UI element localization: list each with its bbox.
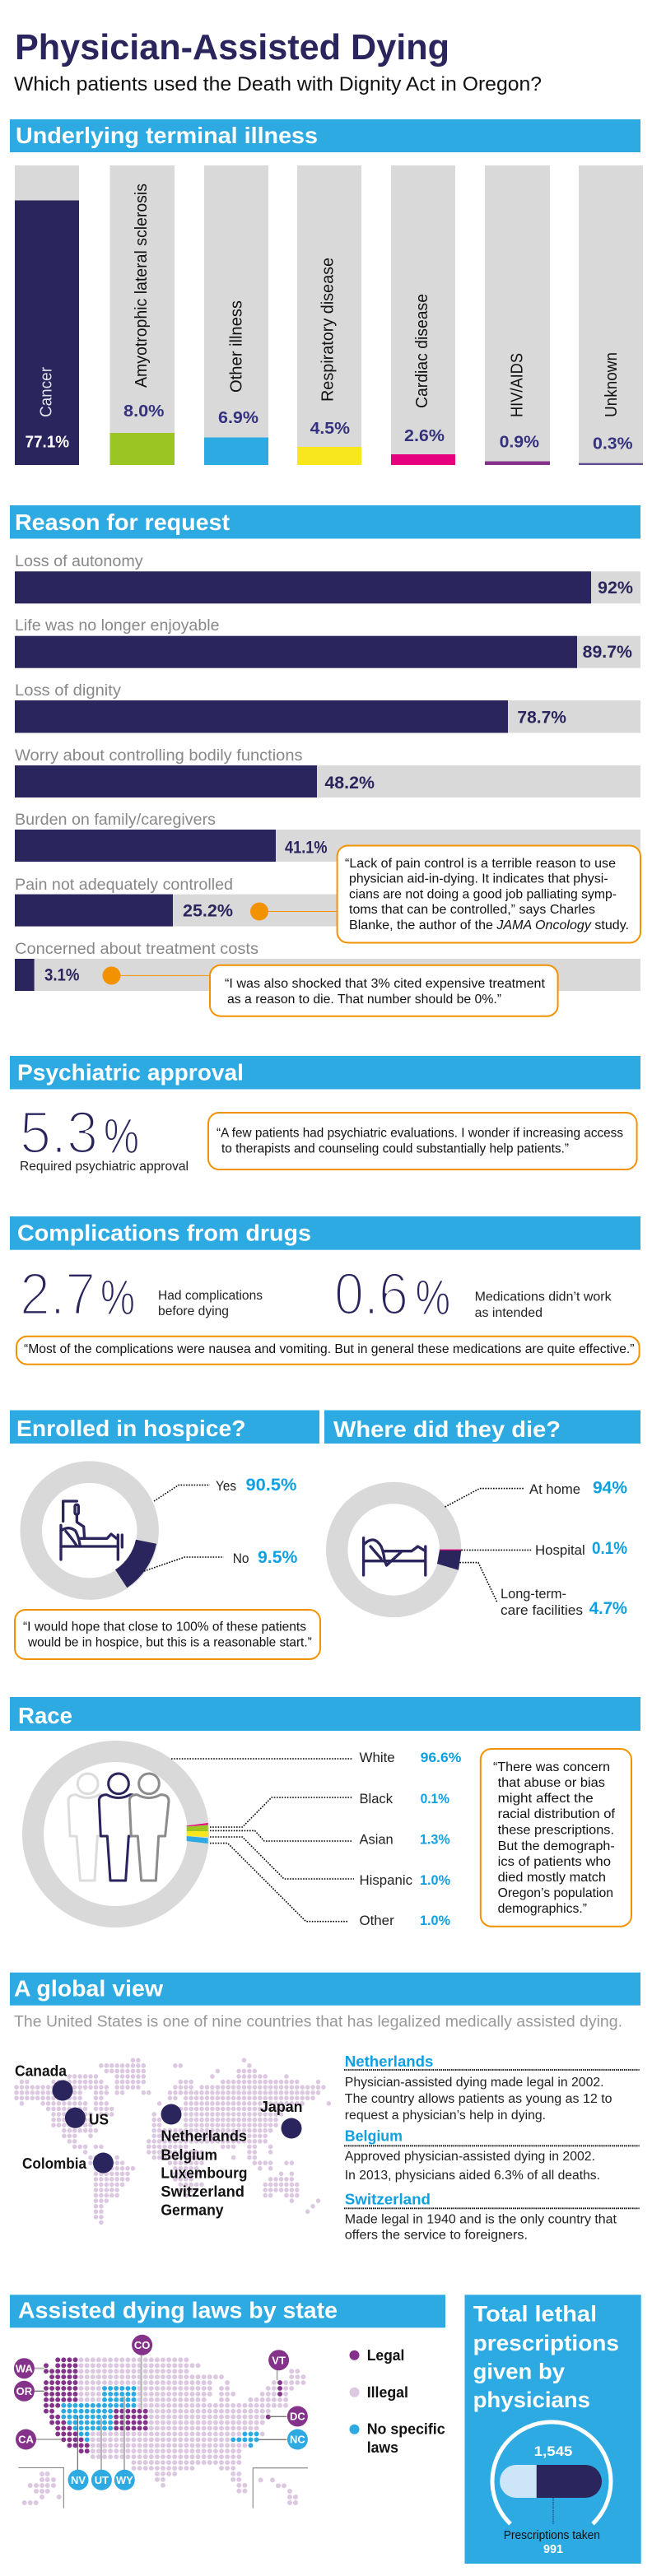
callout: complications quote: “Most of the complications were nausea and vomiting. But in general these medications are quite effective.”	[24, 1342, 634, 1356]
row: loss of autonomy: 92%	[598, 579, 633, 598]
heading banner: assisted dying laws: Assisted dying laws by state	[18, 2298, 338, 2323]
state badge: NV: NV	[71, 2474, 86, 2486]
bar: amyotrophic lateral sclerosis: 8.0%	[123, 402, 165, 421]
row: burden on family: 41.1%	[285, 838, 328, 858]
leader and label: other: Other	[359, 1913, 394, 1928]
leader and label: yes 90.5%: 90.5%	[245, 1476, 297, 1495]
leader and label: at home: 94%	[593, 1479, 627, 1498]
callout: treatment cost quote: “I was also shocked that 3% cited expensive treatment	[225, 977, 546, 991]
row: life no longer enjoyable: Life was no longer enjoyable	[15, 617, 219, 635]
marker: European countries	[161, 2104, 247, 2219]
state badge: CO: CO	[134, 2339, 150, 2351]
callout: race quote: But the demograph-	[498, 1839, 615, 1853]
heading: total lethal prescriptions	[473, 2302, 619, 2412]
row: worry about bodily functions: 48.2%	[324, 774, 375, 793]
leader and label: white: 96.6%	[421, 1750, 461, 1765]
leader and label: long-term care: Long-term-	[501, 1586, 566, 1602]
panel: reason for request	[10, 505, 640, 1016]
heading banner: enrolled in hospice: Enrolled in hospice?	[16, 1416, 245, 1441]
text block: Netherlands: The country allows patients as young as 12 to	[345, 2092, 612, 2106]
stat: 2.7%	[20, 1262, 263, 1328]
bar: cancer: 77.1%	[25, 433, 69, 451]
heading banner: a global view: A global view	[14, 1976, 163, 2002]
heading banner: race	[10, 1697, 640, 1731]
callout: psychiatric quote	[208, 1113, 637, 1169]
leader and label: asian: 1.3%	[420, 1832, 450, 1847]
state badge: CO	[132, 2335, 152, 2355]
heading banner: assisted dying laws	[10, 2295, 445, 2327]
panel: total lethal prescriptions	[464, 2295, 641, 2564]
state badge: WY: WY	[116, 2474, 133, 2486]
leader and label: long-term care: care facilities	[501, 1602, 583, 1618]
leader and label: asian	[210, 1830, 450, 1847]
callout: race quote: these prescriptions.	[498, 1824, 614, 1837]
heading banner: enrolled in hospice	[10, 1411, 319, 1444]
callout: hospice quote: “I would hope that close to 100% of these patients	[23, 1620, 306, 1634]
donut chart: place of death	[337, 1493, 461, 1607]
text block: Switzerland: offers the service to foreigners.	[345, 2229, 528, 2243]
state badge: WY	[114, 2470, 135, 2490]
row: pain not adequately controlled	[15, 876, 640, 927]
callout: race quote	[481, 1749, 631, 1927]
row: loss of dignity: Loss of dignity	[15, 682, 122, 700]
marker: Japan: Japan	[260, 2099, 303, 2115]
stat: 0.6%: Medications didn’t work	[475, 1290, 612, 1304]
callout: race quote: Oregon’s population	[498, 1886, 613, 1900]
heading: total lethal prescriptions: physicians	[473, 2388, 590, 2412]
leader and label: hispanic: 1.0%	[420, 1872, 450, 1888]
heading banner: reason for request: Reason for request	[15, 509, 230, 535]
panel: psychiatric approval	[10, 1056, 640, 1174]
marker: European countries: Switzerland	[161, 2183, 244, 2200]
bar: HIV/AIDS: 0.9%	[500, 433, 539, 451]
state badge: WA: WA	[16, 2362, 33, 2374]
state badge: OR: OR	[16, 2385, 33, 2397]
state badge: VT	[268, 2350, 289, 2370]
panel: enrolled in hospice	[10, 1411, 320, 1659]
marker: European countries: Luxembourg	[161, 2165, 247, 2182]
leader and label: hispanic	[210, 1837, 450, 1888]
stat: 0.6%: 0.6	[334, 1262, 408, 1328]
text block: Netherlands: Netherlands	[345, 2053, 433, 2070]
stat: 2.7%: Had complications	[158, 1289, 263, 1303]
bar: cancer: Cancer	[38, 367, 56, 417]
white gauge arc	[492, 2422, 611, 2524]
panel: where did they die	[324, 1411, 640, 1618]
dotted world map	[16, 2060, 329, 2222]
state badge: UT	[91, 2470, 112, 2490]
donut chart: hospice	[31, 1472, 156, 1589]
panel: underlying terminal illness	[10, 119, 643, 465]
leader and label: other	[210, 1844, 450, 1928]
callout: hospice quote: would be in hospice, but this is a reasonable start.”	[27, 1636, 312, 1650]
marker: Colombia: Colombia	[22, 2155, 87, 2172]
marker: US	[65, 2108, 109, 2128]
icon: three people	[68, 1774, 169, 1881]
text block: Belgium: Approved physician-assisted dying in 2002.	[345, 2150, 595, 2164]
callout: race quote: might affect the	[498, 1792, 594, 1806]
bar: unknown: Unknown	[603, 352, 621, 417]
legend: laws	[367, 2439, 398, 2456]
icon: patient in bed with IV	[61, 1501, 122, 1560]
leader and label: black: 0.1%	[421, 1791, 449, 1806]
panel: a global view	[10, 1973, 640, 2243]
bar: HIV/AIDS: HIV/AIDS	[509, 353, 527, 417]
heading: total lethal prescriptions: given by	[473, 2360, 565, 2384]
row: pain not adequately controlled: 25.2%	[183, 902, 233, 921]
callout: pain control quote: cians are not doing a good job palliating symp-	[349, 887, 617, 902]
callout: race quote: ics of patients who	[498, 1855, 611, 1869]
callout: pain control quote: toms that can be controlled,” says Charles	[349, 903, 595, 917]
stat: 5.3%	[20, 1100, 189, 1174]
heading banner: reason for request	[10, 505, 640, 538]
heading banner: where did they die	[324, 1411, 640, 1444]
stat: 5.3%: Required psychiatric approval	[20, 1160, 189, 1174]
leader and label: white	[171, 1750, 461, 1765]
leader and label: at home: At home	[529, 1481, 580, 1497]
stat: 5.3%: 5.3	[20, 1100, 98, 1166]
text block: Netherlands: request a physician’s help in dying.	[345, 2109, 546, 2123]
row: worry about bodily functions: Worry about controlling bodily functions	[15, 747, 303, 765]
text block: Switzerland: Switzerland	[345, 2191, 431, 2207]
callout: pain control quote: physician aid-in-dying. It indicates that physi-	[349, 872, 608, 886]
heading banner: complications from drugs: Complications from drugs	[17, 1221, 311, 1246]
text block: Belgium: In 2013, physicians aided 6.3% of all deaths.	[345, 2169, 600, 2183]
state badge: DC: DC	[290, 2411, 305, 2423]
inset: Hawaii	[253, 2468, 308, 2509]
row: loss of autonomy	[15, 553, 640, 603]
leader and label: long-term care: 4.7%	[589, 1599, 627, 1618]
dotted US map	[46, 2360, 304, 2491]
heading: total lethal prescriptions: Total lethal	[473, 2302, 597, 2327]
row: treatment costs: 3.1%	[44, 966, 80, 985]
subheading: The United States is one of nine countries that has legalized medically assisted dying.	[14, 2013, 622, 2030]
state badge: NC: NC	[290, 2434, 305, 2446]
inset: Alaska	[18, 2467, 63, 2509]
leader and label: hospital: 0.1%	[592, 1539, 627, 1558]
heading banner: psychiatric approval	[10, 1056, 640, 1090]
leader and label: long-term care	[459, 1563, 627, 1618]
bar: unknown: 0.3%	[593, 435, 633, 453]
heading: total lethal prescriptions: prescriptions	[473, 2331, 619, 2355]
callout: race quote: “There was concern	[493, 1760, 610, 1774]
leader and label: at home	[445, 1479, 627, 1507]
state badge: DC	[287, 2406, 308, 2426]
callout: psychiatric quote: to therapists and counseling could substantially help patients.”	[221, 1142, 569, 1156]
icon: pill	[500, 2465, 602, 2524]
legend: No specific	[367, 2421, 445, 2438]
state badge: NV	[68, 2470, 89, 2490]
state badge: VT: VT	[272, 2354, 286, 2366]
marker: Canada	[15, 2063, 72, 2100]
state badge: NC	[287, 2430, 308, 2449]
row: life no longer enjoyable: 89.7%	[583, 643, 632, 662]
connector lines east	[258, 2369, 286, 2439]
bar: cardiac disease	[391, 165, 455, 465]
legend: Legal	[367, 2347, 404, 2364]
callout: complications quote	[16, 1337, 640, 1365]
marker: US: US	[89, 2112, 109, 2128]
prescriptions taken	[504, 2529, 600, 2556]
bar: cardiac disease: 2.6%	[404, 427, 445, 445]
text block: Netherlands	[344, 2053, 640, 2123]
callout: hospice quote	[15, 1610, 320, 1659]
panel: assisted dying laws by state	[10, 2295, 445, 2509]
marker: European countries: Germany	[161, 2202, 224, 2219]
callout: pain control quote	[338, 846, 640, 943]
leader and label: no 9.5%: No	[233, 1551, 249, 1566]
heading banner: psychiatric approval: Psychiatric approval	[17, 1060, 244, 1086]
callout: pain control quote: Blanke, the author of the JAMA Oncology study.	[349, 918, 629, 932]
bar: cancer	[15, 165, 79, 465]
row: life no longer enjoyable	[15, 617, 640, 668]
row: burden on family: Burden on family/caregivers	[15, 811, 216, 829]
row: loss of dignity: 78.7%	[517, 708, 566, 728]
marker: European countries: Netherlands	[161, 2128, 247, 2145]
bar: amyotrophic lateral sclerosis: Amyotrophic lateral sclerosis	[133, 184, 151, 388]
row: worry about bodily functions	[15, 747, 640, 797]
text block: Belgium	[344, 2128, 640, 2183]
bar: unknown	[579, 165, 643, 465]
row: burden on family	[15, 811, 640, 862]
callout: psychiatric quote: “A few patients had psychiatric evaluations. I wonder if increasing access	[217, 1127, 623, 1141]
bar: HIV/AIDS	[485, 165, 550, 465]
heading banner: complications from drugs	[10, 1216, 640, 1250]
heading banner: race: Race	[18, 1703, 72, 1728]
legend	[349, 2347, 445, 2456]
leader and label: other: 1.0%	[420, 1913, 450, 1928]
bar: amyotrophic lateral sclerosis	[110, 165, 175, 465]
state badge: CA: CA	[18, 2434, 34, 2446]
row: treatment costs	[15, 941, 640, 991]
row: treatment costs: Concerned about treatment costs	[15, 941, 258, 958]
leader and label: no 9.5%	[144, 1548, 298, 1571]
prescriptions taken: Prescriptions taken	[504, 2529, 600, 2542]
marker: European countries: Belgium	[161, 2146, 217, 2163]
leader and label: white: White	[359, 1750, 395, 1765]
icon: empty bed	[364, 1538, 426, 1575]
leader and label: black: Black	[359, 1791, 393, 1806]
bar: other illness: 6.9%	[218, 409, 258, 427]
leader and label: hospital	[461, 1539, 627, 1558]
subtitle: Which patients used the Death with Dignity Act in Oregon?	[14, 73, 542, 95]
bar: respiratory disease: Respiratory disease	[319, 258, 338, 402]
heading banner: underlying terminal illness: Underlying terminal illness	[16, 123, 318, 148]
callout: treatment cost quote: as a reason to die. That number should be 0%.”	[227, 993, 501, 1007]
text block: Netherlands: Physician-assisted dying made legal in 2002.	[345, 2076, 604, 2090]
callout: race quote: racial distribution of	[498, 1807, 616, 1821]
connector lines for state labels	[35, 2355, 142, 2471]
row: loss of autonomy: Loss of autonomy	[15, 553, 143, 570]
bar: cardiac disease: Cardiac disease	[413, 294, 431, 408]
leader and label: asian: Asian	[359, 1832, 394, 1847]
donut chart: race	[33, 1751, 208, 1917]
bar: respiratory disease: 4.5%	[310, 420, 350, 438]
total value: 1,545	[534, 2443, 572, 2459]
stat: 2.7%: before dying	[158, 1304, 229, 1318]
leader and label: yes 90.5%: Yes	[216, 1478, 236, 1494]
leader and label: no 9.5%: 9.5%	[258, 1548, 298, 1567]
row: loss of dignity	[15, 682, 640, 732]
leader and label: hospital: Hospital	[535, 1542, 585, 1558]
stat: 5.3%: %	[104, 1109, 139, 1164]
heading banner: a global view	[10, 1973, 640, 2006]
text block: Belgium: Belgium	[345, 2128, 403, 2145]
callout: race quote: died mostly match	[498, 1871, 606, 1885]
prescriptions taken: 991	[543, 2542, 563, 2556]
bar: other illness	[204, 165, 268, 465]
heading banner: where did they die: Where did they die?	[333, 1416, 561, 1442]
stat: 0.6%	[334, 1262, 612, 1328]
leader and label: black	[210, 1791, 449, 1827]
heading banner: underlying terminal illness	[10, 119, 640, 152]
title: Physician-Assisted Dying	[15, 27, 449, 67]
marker: Japan	[260, 2099, 303, 2138]
leader and label: yes 90.5%	[154, 1476, 297, 1501]
stat: 2.7%: %	[100, 1270, 135, 1325]
bar: other illness: Other illness	[227, 300, 245, 393]
callout: treatment cost quote	[210, 965, 558, 1016]
panel: race	[10, 1697, 640, 1928]
callout: race quote: demographics.”	[498, 1902, 587, 1916]
row: pain not adequately controlled: Pain not adequately controlled	[15, 876, 233, 894]
state badge: WA	[14, 2358, 35, 2378]
text block: Switzerland	[344, 2191, 640, 2243]
callout: pain control quote: “Lack of pain control is a terrible reason to use	[345, 857, 616, 871]
marker: Canada: Canada	[15, 2063, 68, 2080]
legend: Illegal	[367, 2384, 408, 2401]
stat: 0.6%: as intended	[475, 1306, 543, 1320]
marker: Colombia	[22, 2153, 114, 2173]
bar: respiratory disease	[297, 165, 361, 465]
leader and label: hispanic: Hispanic	[359, 1872, 412, 1888]
state badge: UT: UT	[95, 2474, 109, 2486]
state badge: CA	[16, 2430, 36, 2449]
state badge: OR	[14, 2381, 35, 2402]
panel: complications from drugs	[10, 1216, 640, 1365]
text block: Switzerland: Made legal in 1940 and is the only country that	[345, 2213, 617, 2227]
stat: 2.7%: 2.7	[20, 1262, 95, 1328]
stat: 0.6%: %	[416, 1270, 450, 1325]
callout: race quote: that abuse or bias	[498, 1776, 605, 1790]
